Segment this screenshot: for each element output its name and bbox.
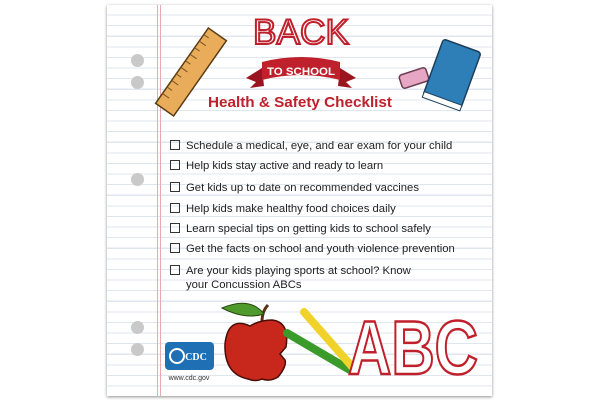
logo: CDC: CDC [185, 352, 207, 363]
text: Get kids up to date on recommended vaccines [186, 182, 419, 194]
text: Help kids stay active and ready to learn [186, 160, 383, 172]
panel: notebook paper [107, 5, 492, 396]
icon: book [422, 39, 481, 111]
banner: to school [246, 57, 356, 88]
checklist [170, 140, 455, 291]
text: Get the facts on school and youth violence prevention [186, 243, 455, 255]
heading: ABC: ABC [348, 306, 478, 391]
logo: CDC: www.cdc.gov [168, 375, 210, 382]
icon: apple [222, 303, 287, 380]
text: Learn special tips on getting kids to school safely [186, 223, 431, 235]
heading: BACK: BACK [253, 13, 349, 52]
banner: to school: TO SCHOOL [267, 66, 335, 78]
text: Help kids make healthy food choices daily [186, 203, 396, 215]
text: Are your kids playing sports at school? Know [186, 265, 411, 277]
text: Schedule a medical, eye, and ear exam for your child [186, 140, 452, 152]
text: your Concussion ABCs [186, 279, 302, 291]
icon: crayons [287, 312, 355, 370]
icon: ruler [156, 28, 226, 116]
icon: eraser [399, 67, 429, 89]
logo: CDC [165, 342, 214, 382]
subtitle: Health & Safety Checklist [208, 94, 392, 111]
